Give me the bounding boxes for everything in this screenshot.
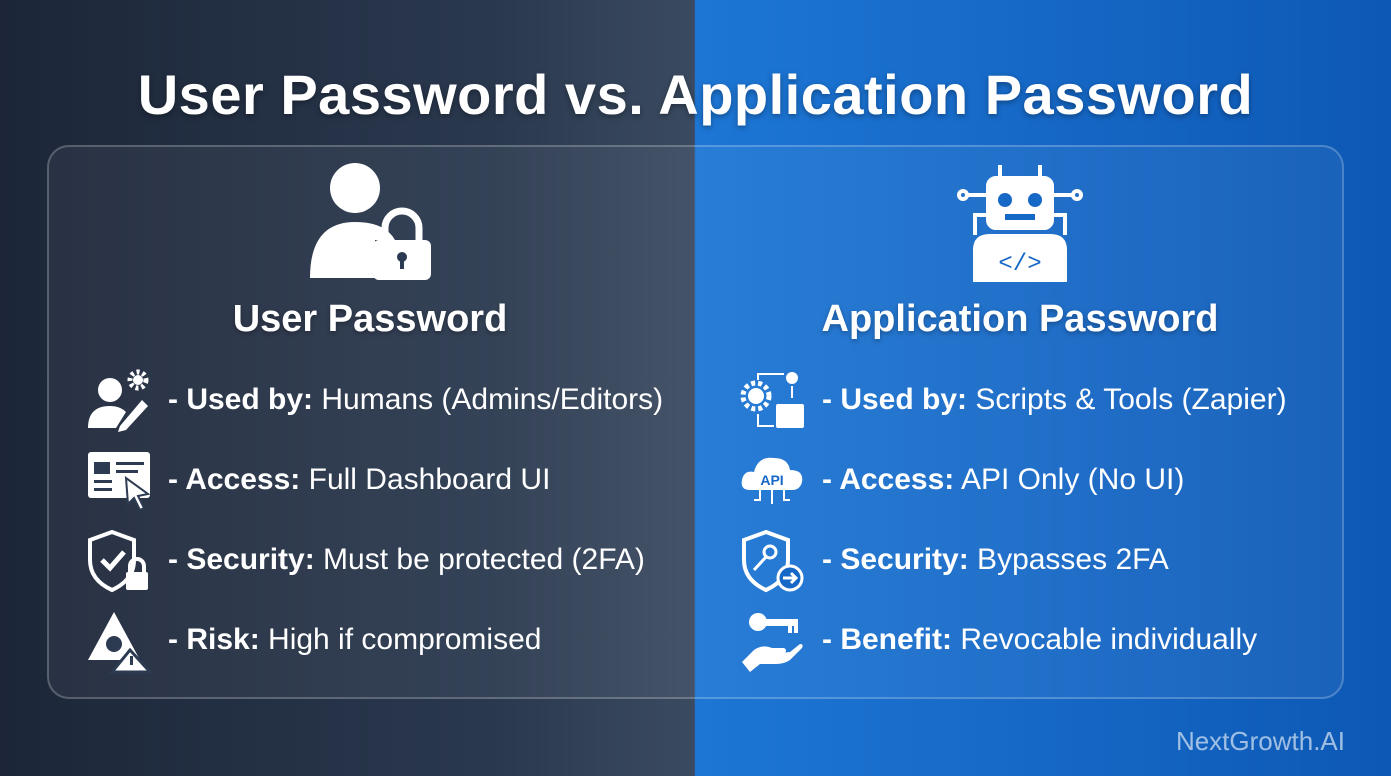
- icon: API cloud: API: [760, 472, 784, 488]
- icon: scripts gears: [740, 372, 804, 428]
- text: risk: - Risk: High if compromised: [168, 623, 541, 656]
- icon: user with lock: [310, 163, 431, 280]
- text: used by: - Used by: Humans (Admins/Editors): [168, 383, 663, 416]
- heading: user password: User Password: [233, 298, 507, 340]
- text: benefit: - Benefit: Revocable individually: [822, 623, 1257, 656]
- text: security: - Security: Bypasses 2FA: [822, 543, 1169, 576]
- icon: robot: </>: [998, 251, 1042, 278]
- left rows: [88, 370, 663, 674]
- text: access: - Access: Full Dashboard UI: [168, 463, 550, 496]
- icon: robot: [957, 165, 1083, 282]
- panel: comparison: [47, 145, 1344, 699]
- title: User Password vs. Application Password: [138, 63, 1253, 126]
- right rows: [740, 372, 1287, 672]
- icon: API cloud: [742, 458, 802, 504]
- text: access: - Access: API Only (No UI): [822, 463, 1184, 496]
- icon: skull warning: [88, 612, 152, 674]
- text: used by: - Used by: Scripts & Tools (Zapier): [822, 383, 1287, 416]
- icon: shield check lock: [88, 530, 148, 592]
- text: security: - Security: Must be protected (2FA): [168, 543, 645, 576]
- icon: user gear: [88, 370, 148, 432]
- icon: shield key: [742, 530, 804, 592]
- icon: hand key: [742, 613, 803, 672]
- icon: dashboard: [88, 452, 150, 511]
- heading: application password: Application Password: [822, 298, 1218, 340]
- footer: brand: NextGrowth.AI: [1176, 726, 1345, 756]
